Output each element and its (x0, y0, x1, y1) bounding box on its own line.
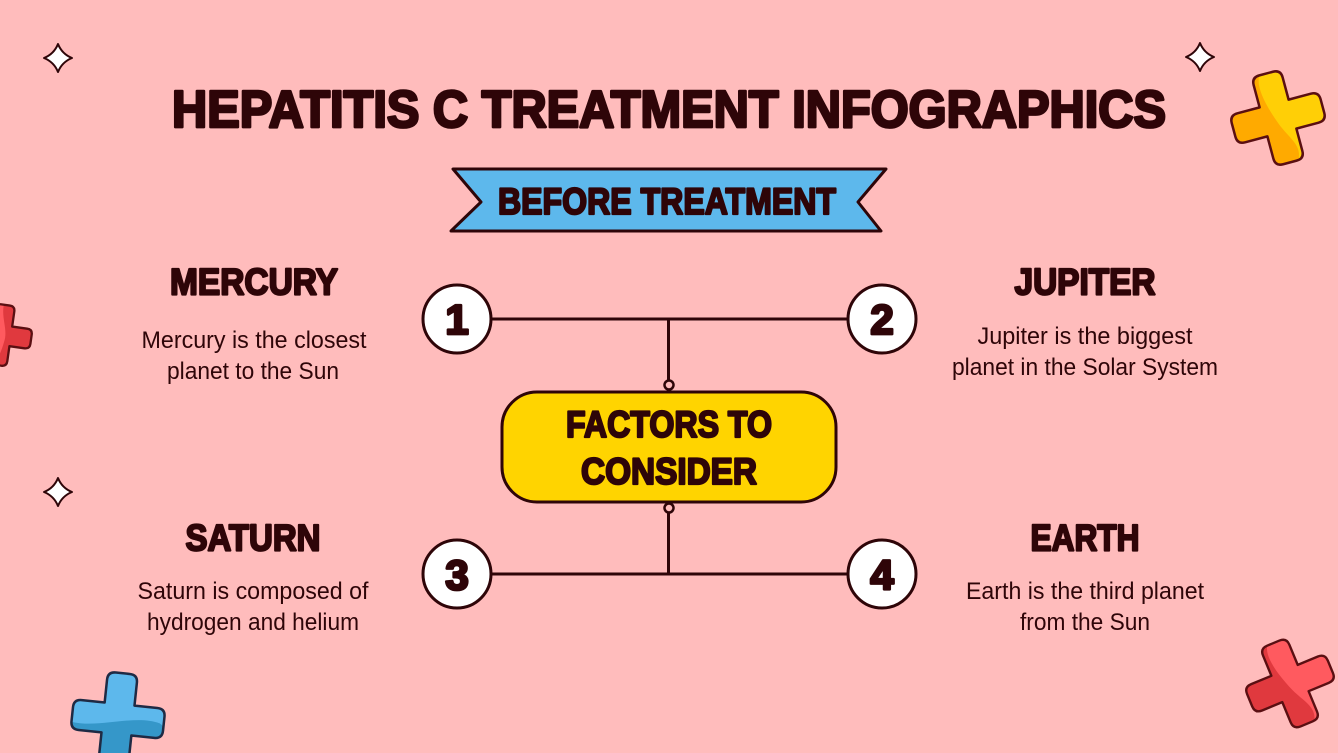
number badge 1 (423, 285, 491, 353)
icon: yellow cross (1230, 70, 1326, 166)
panel: earth: from the Sun (1020, 609, 1150, 636)
number badge 2: 2 (870, 296, 894, 343)
panel: saturn: hydrogen and helium (147, 609, 359, 636)
panel: earth: Earth is the third planet (966, 578, 1204, 605)
central box: factors to consider: FACTORS TO (566, 403, 772, 445)
number badge 3: 3 (445, 552, 469, 598)
panel: jupiter: Jupiter is the biggest (978, 323, 1193, 350)
icon: sparkle top right (1186, 43, 1214, 71)
panel: saturn: SATURN (186, 518, 320, 558)
panel: earth: EARTH (1030, 518, 1140, 558)
panel: earth (966, 518, 1204, 636)
number badge 1: 1 (445, 296, 469, 343)
central box: factors to consider: CONSIDER (581, 450, 757, 492)
icon: blue cross bottom left (70, 671, 166, 753)
icon: red cross left edge (0, 303, 33, 367)
panel: mercury: planet to the Sun (167, 358, 339, 385)
icon: sparkle top left (44, 44, 72, 72)
icon: sparkle middle left (44, 478, 72, 506)
panel: saturn (138, 518, 369, 636)
number badge 4: 4 (870, 552, 894, 598)
number badge 4 (848, 540, 916, 608)
number badge 2 (848, 285, 916, 353)
title: HEPATITIS C TREATMENT INFOGRAPHICS (172, 81, 1166, 139)
panel: jupiter: JUPITER (1014, 262, 1156, 302)
panel: jupiter (952, 262, 1218, 381)
connector node: bottom (664, 504, 674, 512)
number badge 3 (423, 540, 491, 608)
banner: before treatment (451, 169, 886, 231)
panel: jupiter: planet in the Solar System (952, 354, 1218, 381)
connector node: top (664, 380, 674, 390)
panel: mercury: MERCURY (170, 262, 338, 302)
banner: before treatment: BEFORE TREATMENT (498, 180, 836, 222)
panel: mercury: Mercury is the closest (142, 327, 367, 354)
panel: saturn: Saturn is composed of (138, 578, 369, 605)
icon: red cross bottom right (1245, 638, 1335, 728)
panel: mercury (142, 262, 367, 385)
central box: factors to consider (502, 392, 836, 502)
connector: top lines (490, 319, 850, 380)
connector: bottom lines (490, 513, 850, 574)
